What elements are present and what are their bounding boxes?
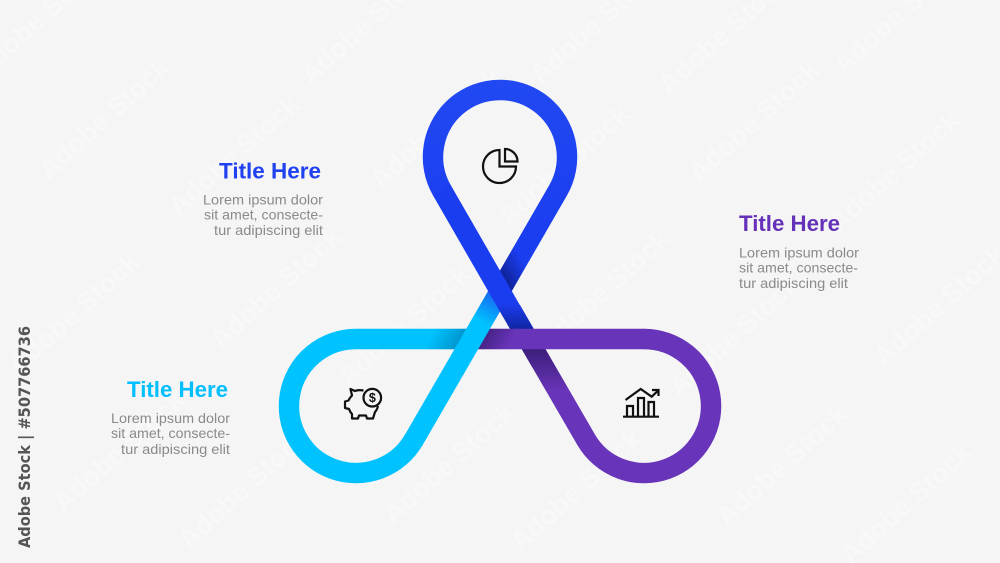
shadow below purple band [530, 343, 558, 392]
body text: purple block [739, 244, 859, 291]
cyan loop with horizontal band [289, 339, 472, 473]
body text: blue block: sit amet, consecte- [204, 206, 323, 222]
watermark pattern: Adobe Stock [173, 421, 316, 555]
body text: purple block: tur adipiscing elit [739, 275, 848, 291]
watermark pattern: Adobe Stock [823, 104, 966, 238]
text block: blue title [203, 158, 323, 238]
body text: blue block: tur adipiscing elit [214, 222, 323, 238]
blue left leg [442, 190, 512, 312]
text block: cyan title [111, 377, 230, 457]
body text: blue block [203, 192, 323, 238]
heading: blue: Title Here [219, 158, 321, 184]
heading: purple: Title Here [739, 211, 840, 236]
woven three-loop diagram [289, 90, 711, 473]
watermark pattern: Adobe Stock [33, 51, 176, 185]
heading: cyan: Title Here [127, 377, 228, 402]
shadow on right blue leg [500, 230, 535, 291]
watermark pattern: Adobe Stock [48, 384, 191, 518]
watermark pattern: Adobe Stock [505, 423, 648, 557]
body text: cyan block: tur adipiscing elit [121, 441, 230, 457]
body text: purple block: sit amet, consecte- [739, 260, 858, 276]
icon: piggy bank with dollar coin [345, 389, 381, 418]
purple loop with lower leg [511, 310, 711, 473]
text block: purple title [739, 211, 859, 291]
icon: piggy bank with dollar coin: $ [369, 391, 376, 405]
blue-to-purple leg segment [511, 310, 541, 362]
icon: bar chart with rising arrow [623, 389, 659, 417]
shadow on purple band [472, 329, 520, 349]
blue top loop [433, 90, 567, 291]
shadow on cyan band [425, 329, 472, 349]
cyan diagonal band [413, 291, 500, 441]
watermark pattern: Adobe Stock [365, 61, 508, 195]
purple horizontal band [472, 329, 645, 349]
watermark pattern: Adobe Stock [493, 98, 636, 232]
watermark pattern: Adobe Stock [333, 258, 476, 392]
icon: pie chart [483, 149, 518, 183]
watermark pattern: Adobe Stock [163, 88, 306, 222]
watermark pattern: Adobe Stock [533, 223, 676, 357]
body text: purple block: Lorem ipsum dolor [739, 244, 859, 260]
body text: cyan block: Lorem ipsum dolor [111, 410, 230, 426]
shadow above purple band [497, 306, 534, 329]
body text: cyan block: sit amet, consecte- [111, 425, 230, 441]
watermark pattern: Adobe Stock [3, 246, 146, 380]
body text: cyan block [111, 410, 230, 457]
watermark pattern: Adobe Stock [683, 54, 826, 188]
watermark pattern: Adobe Stock [378, 396, 521, 530]
body text: blue block: Lorem ipsum dolor [203, 192, 323, 208]
watermark pattern: Adobe Stock [711, 398, 854, 532]
watermark pattern: Adobe Stock [663, 268, 806, 402]
stock id side label: Adobe Stock | #507766736 [15, 326, 35, 548]
blue fade on cyan diagonal [478, 291, 500, 329]
watermark pattern: Adobe Stock [205, 221, 348, 355]
